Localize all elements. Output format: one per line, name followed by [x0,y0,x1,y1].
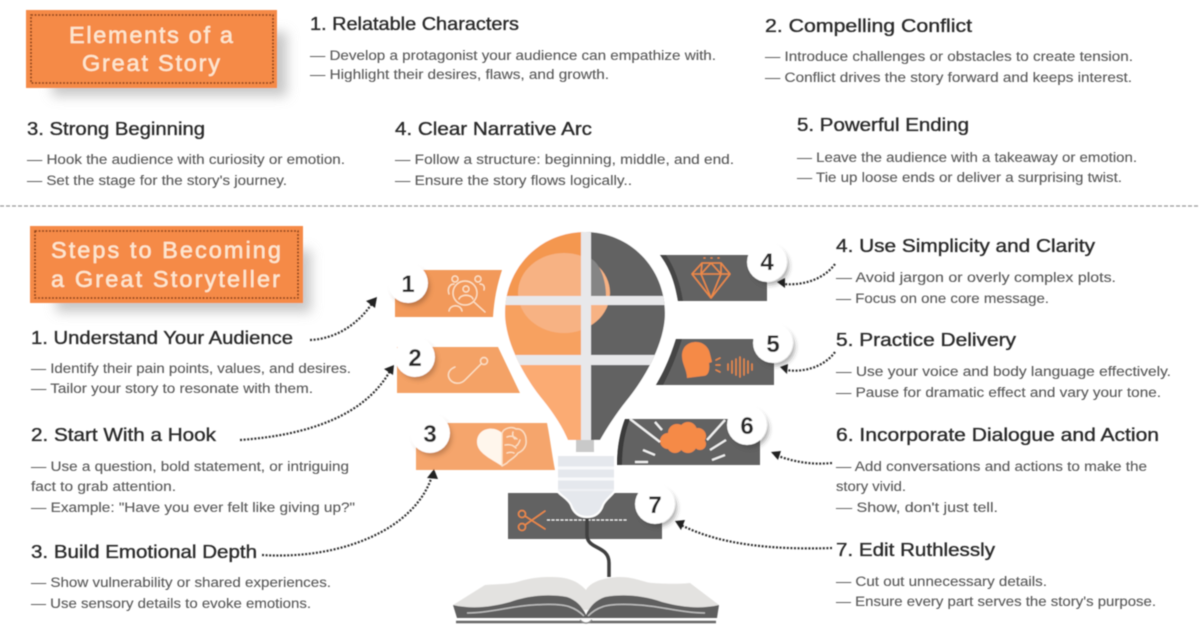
panel: elements of a great story title: Elements of a [69,22,234,48]
icon: exploding cloud [630,419,726,462]
text block: compelling conflict: — Introduce challenges or obstacles to create tension. [765,49,1133,64]
arrow: step 6 [771,451,832,464]
text block: edit ruthlessly: — Cut out unnecessary details. [836,574,1047,589]
text block: edit ruthlessly: 7. Edit Ruthlessly [836,540,995,560]
arrow: step 3 [262,469,438,556]
icon: light bulb [500,230,670,517]
number badge 2: 2 [408,345,422,372]
text block: use simplicity and clarity [836,236,1116,306]
icon: heart and brain [477,428,526,466]
number badge 5: 5 [766,331,780,358]
text block: build emotional depth: — Show vulnerability or shared experiences. [31,575,331,590]
text block: clear narrative arc [395,119,734,188]
text block: practice delivery [836,330,1171,400]
text block: start with a hook: — Example: "Have you ever felt like giving up?" [31,500,355,515]
icon: audience search [448,276,485,312]
text block: incorporate dialogue and action: — Show, don't just tell. [836,500,998,515]
panel: elements of a great story title [26,10,287,96]
text block: powerful ending [797,115,1137,185]
text block: incorporate dialogue and action: 6. Incorporate Dialogue and Action [836,425,1159,445]
icon: scissors [518,510,545,530]
panel 7: scissors [508,493,662,539]
text block: strong beginning: — Hook the audience with curiosity or emotion. [27,152,345,167]
number badge 1: 1 [401,271,415,298]
panel 3: heart and brain [416,423,555,470]
text block: start with a hook: — Use a question, bold statement, or intriguing [31,459,349,474]
number badge 5 [753,323,795,366]
number badge 1 [388,263,430,306]
panel: steps to becoming a great storyteller title [30,226,311,312]
text block: edit ruthlessly: — Ensure every part serves the story's purpose. [836,594,1156,609]
panel 5: speaking head [656,339,774,385]
text block: incorporate dialogue and action: story vivid. [836,479,906,494]
number badge 3: 3 [423,421,437,448]
text block: practice delivery: — Use your voice and body language effectively. [836,364,1171,379]
text block: powerful ending: — Leave the audience with a takeaway or emotion. [797,150,1137,165]
arrow: step 4 [777,264,835,288]
icon: sound wave [728,357,752,377]
text block: practice delivery: — Pause for dramatic effect and vary your tone. [836,385,1161,400]
text block: relatable characters: — Highlight their desires, flaws, and growth. [310,67,609,82]
text block: compelling conflict: — Conflict drives the story forward and keeps interest. [765,70,1132,85]
bulb screw base [557,440,615,517]
number badge 4: 4 [760,249,774,276]
text block: build emotional depth: — Use sensory details to evoke emotions. [31,596,311,611]
panel: steps to becoming a great storyteller title: a Great Storyteller [51,266,280,292]
icon: diamond [692,258,730,298]
text block: understand your audience [31,328,351,396]
arrow: step 7 [675,520,832,548]
text block: relatable characters: 1. Relatable Characters [310,14,519,34]
number badge 2 [395,337,437,380]
arrow: step 2 [240,365,394,440]
text block: use simplicity and clarity: 4. Use Simplicity and Clarity [836,236,1095,256]
arrow: step 5 [780,352,835,374]
text block: strong beginning [27,119,345,188]
text block: understand your audience: — Tailor your story to resonate with them. [31,381,313,396]
number badge 6: 6 [740,413,754,440]
icon: wire [587,517,609,577]
text block: incorporate dialogue and action [836,425,1159,515]
text block: relatable characters: — Develop a protagonist your audience can empathize with. [310,48,716,63]
number badge 7 [635,484,677,527]
number badge 7: 7 [648,492,662,519]
text block: strong beginning: 3. Strong Beginning [27,119,205,139]
icon: speaking head [682,342,720,378]
text block: start with a hook [31,425,355,515]
text block: understand your audience: 1. Understand Your Audience [31,328,293,348]
icon: open book [453,577,719,623]
panel: elements of a great story title: Great Story [82,50,220,76]
text block: clear narrative arc: — Follow a structure: beginning, middle, and end. [395,152,734,167]
number badge 6 [727,405,769,448]
text block: compelling conflict: 2. Compelling Conflict [765,16,972,36]
text block: build emotional depth [31,542,331,611]
panel 6: speech burst [617,419,760,465]
number badge 3 [410,413,452,456]
text block: strong beginning: — Set the stage for the story's journey. [27,173,287,188]
text block: clear narrative arc: 4. Clear Narrative Arc [395,119,592,139]
text block: compelling conflict [765,16,1133,85]
text block: edit ruthlessly [836,540,1156,609]
text block: understand your audience: — Identify their pain points, values, and desires. [31,361,351,376]
panel 4: diamond [660,255,767,301]
panel: steps to becoming a great storyteller title: Steps to Becoming [51,237,281,263]
text block: start with a hook: 2. Start With a Hook [31,425,217,445]
text block: powerful ending: 5. Powerful Ending [797,115,969,135]
text block: build emotional depth: 3. Build Emotional Depth [31,542,257,562]
icon: fish hook [448,358,488,383]
number badge 4 [747,242,789,285]
text block: use simplicity and clarity: — Avoid jargon or overly complex plots. [836,270,1116,285]
text block: practice delivery: 5. Practice Delivery [836,330,1016,350]
panel 1: audience [395,270,502,317]
text block: start with a hook: fact to grab attention. [31,479,176,494]
text block: use simplicity and clarity: — Focus on one core message. [836,291,1049,306]
panel 2: hook [397,347,520,393]
text block: incorporate dialogue and action: — Add conversations and actions to make the [836,459,1147,474]
text block: powerful ending: — Tie up loose ends or deliver a surprising twist. [797,170,1122,185]
arrow: step 1 [310,297,377,340]
text block: clear narrative arc: — Ensure the story flows logically.. [395,173,632,188]
text block: relatable characters [310,14,716,82]
